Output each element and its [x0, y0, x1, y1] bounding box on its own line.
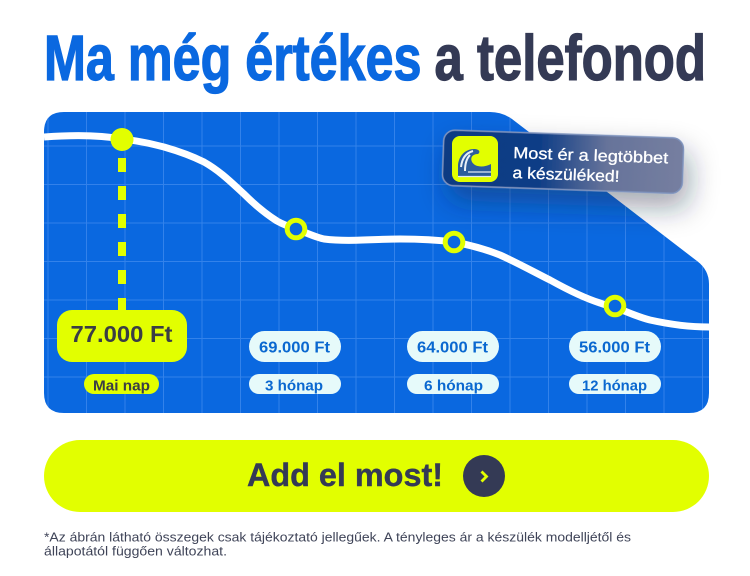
callout text: a készüléked! — [512, 165, 620, 186]
price curve — [44, 136, 709, 327]
price label: today — [57, 310, 187, 362]
callout: best value now — [442, 130, 684, 194]
price label: 3 months: 69.000 Ft — [259, 340, 331, 356]
date label: 3 months — [249, 374, 341, 394]
price label: 3 months — [249, 331, 341, 362]
chart background — [44, 112, 709, 413]
marker: 6 months — [445, 233, 463, 251]
price label: 6 months: 64.000 Ft — [417, 340, 489, 356]
dashed line: today — [118, 158, 126, 312]
button label: Add el most! — [247, 457, 443, 493]
marker: 3 months — [287, 220, 305, 238]
icon: wave — [452, 136, 498, 182]
call to action button — [44, 440, 709, 512]
date label: 6 months — [407, 374, 499, 394]
icon: arrow — [463, 455, 505, 497]
marker: today — [110, 128, 134, 151]
disclaimer: állapotától függően változhat. — [44, 544, 227, 558]
price label: 12 months: 56.000 Ft — [579, 340, 651, 356]
disclaimer: *Az ábrán látható összegek csak tájékoztató jellegűek. A tényleges ár a készülék modelljétől és — [44, 530, 632, 544]
date label: 12 months — [569, 374, 661, 394]
date label: 3 months: 3 hónap — [265, 378, 323, 394]
date label: today: Mai nap — [93, 378, 150, 394]
price label: 6 months — [407, 331, 499, 362]
date label: today — [84, 374, 159, 394]
callout text: Most ér a legtöbbet — [513, 145, 669, 167]
disclaimer — [44, 530, 632, 558]
title: Ma még értékes — [44, 22, 422, 94]
callout text — [512, 145, 669, 187]
panel: price chart — [44, 112, 709, 413]
date label: 12 months: 12 hónap — [582, 378, 647, 394]
price label: 12 months — [569, 331, 661, 362]
price label: today: 77.000 Ft — [70, 321, 173, 347]
marker: 12 months — [606, 297, 624, 315]
date label: 6 months: 6 hónap — [424, 378, 483, 394]
